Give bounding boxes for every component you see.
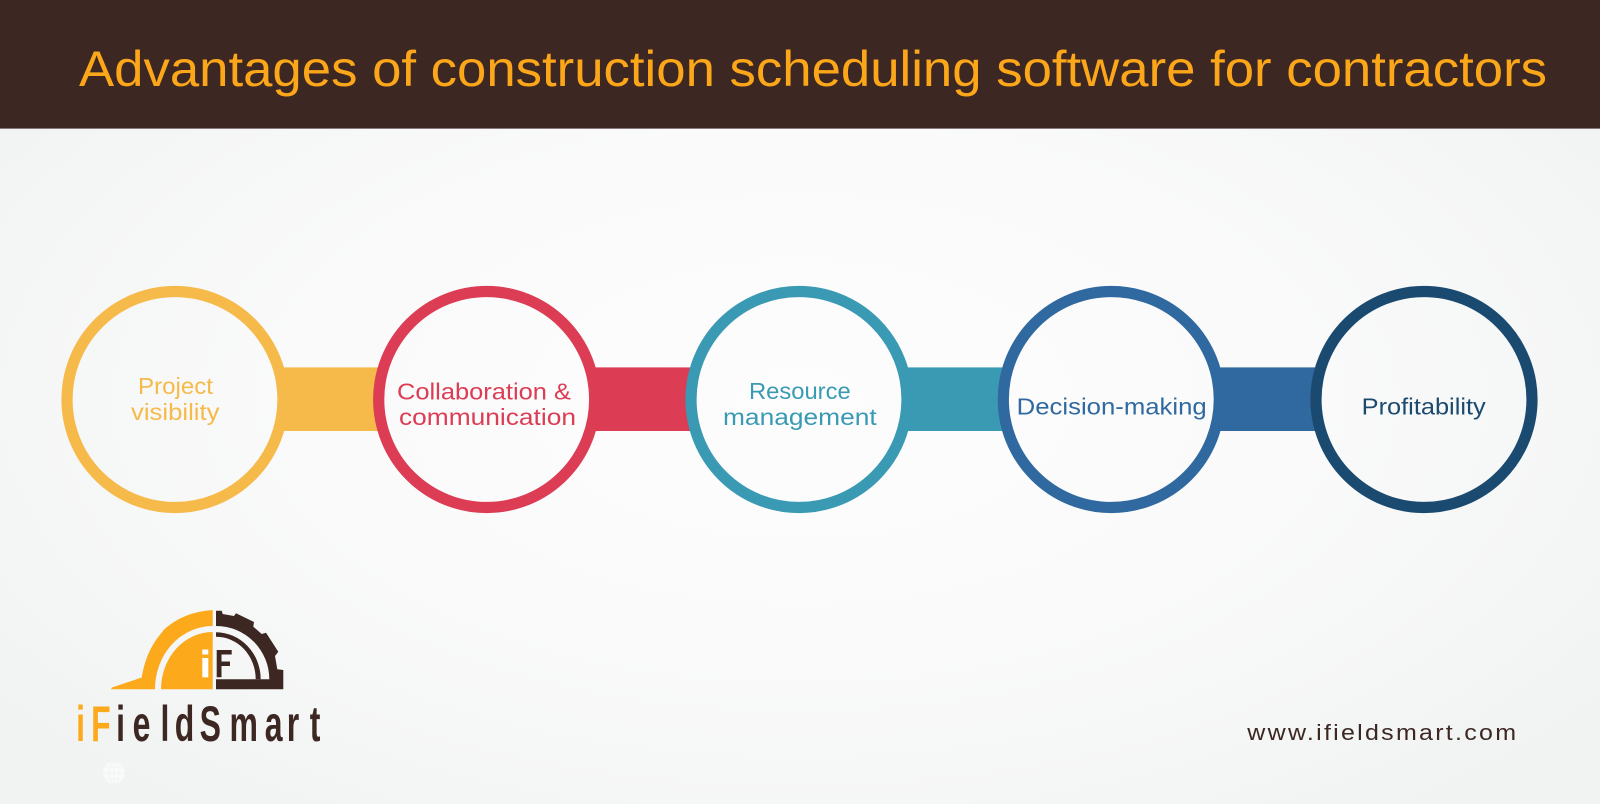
step 2: collaboration and communication: [379, 292, 595, 508]
header band: [0, 0, 1600, 129]
step 5: profitability: [1316, 292, 1532, 508]
label: resource management: management: [723, 404, 877, 430]
icon: faint globe: [103, 762, 125, 784]
label: decision-making: Decision-making: [1017, 394, 1207, 420]
label: resource management: Resource: [749, 378, 851, 404]
connector bar: teal: [905, 367, 1005, 431]
icon: helmet half: [111, 610, 213, 689]
logo: iFieldSmart: [76, 610, 320, 752]
step 1: project visibility: [67, 292, 283, 508]
step 3: resource management: [691, 292, 907, 508]
label: collaboration and communication: communication: [399, 404, 576, 430]
title: Advantages of construction scheduling software for contractors: [79, 41, 1547, 97]
icon: gear half: [216, 611, 283, 689]
label: collaboration and communication: Collaboration &: [397, 378, 571, 404]
wordmark: iF: [76, 696, 111, 752]
connector bar: red: [593, 367, 693, 431]
label: profitability: Profitability: [1362, 394, 1486, 420]
connector bar: blue: [1217, 367, 1317, 431]
icon: iF monogram: [202, 650, 232, 677]
step 4: decision-making: [1003, 292, 1219, 508]
website url: www.ifieldsmart.com: [1246, 720, 1518, 745]
label: project visibility: Project: [138, 373, 213, 399]
connector bar: yellow: [281, 367, 381, 431]
wordmark: ieldSmart: [116, 696, 320, 752]
label: project visibility: visibility: [131, 399, 220, 425]
